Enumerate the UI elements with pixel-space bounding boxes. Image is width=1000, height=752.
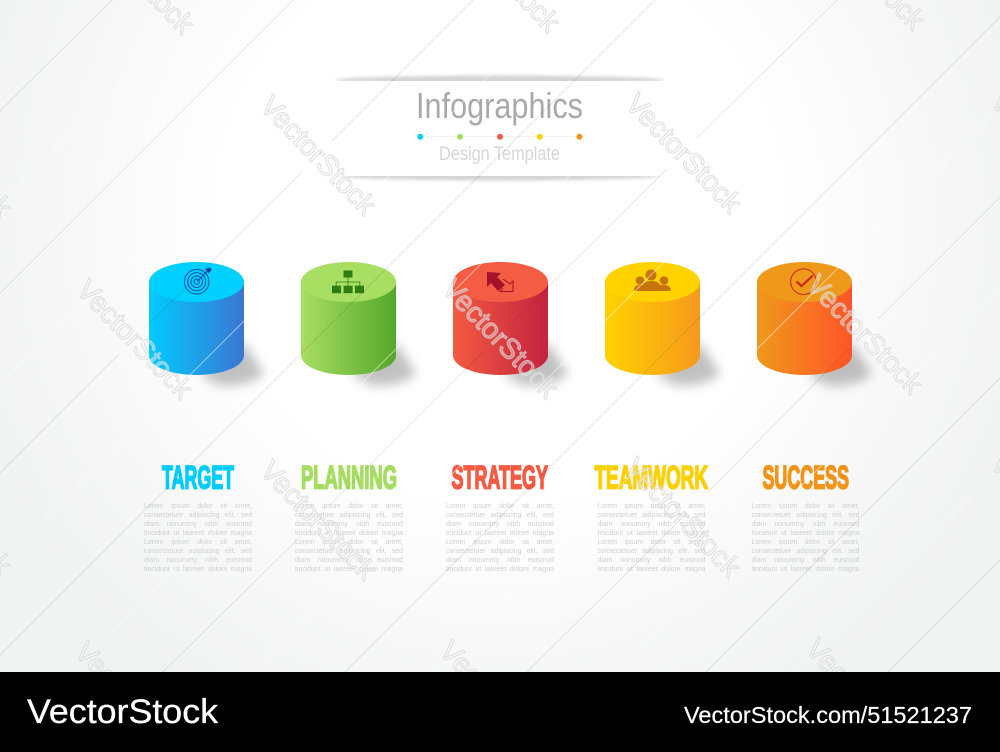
text block: planning: diam nonummy nibh euismod <box>295 520 403 528</box>
text block: target: tincidunt ut laoreet dolore magna <box>144 566 252 572</box>
text block: success: consectetuer adipiscing elit, sed <box>752 548 860 554</box>
watermarks: VectorStock <box>800 269 929 401</box>
text block: target: diam nonummy nibh euismod <box>144 556 252 564</box>
heading: success: SUCCESS <box>762 460 849 496</box>
watermarks: VectorStock <box>70 274 199 406</box>
heading: target: TARGET <box>162 460 234 496</box>
cylinder: planning <box>301 262 416 386</box>
heading: strategy: STRATEGY <box>452 460 548 496</box>
text block: planning: consectetuer adipiscing elit, sed <box>295 512 403 518</box>
cylinder: teamwork <box>605 262 720 386</box>
text block: strategy <box>446 502 554 572</box>
title: Infographics <box>416 85 583 126</box>
cylinder: strategy <box>453 262 568 386</box>
text block: teamwork: consectetuer adipiscing elit, sed <box>598 512 706 518</box>
heading: teamwork: TEAMWORK <box>594 460 708 496</box>
text block: target: Lorem ipsum dolor sit amet, <box>144 502 252 510</box>
panel: title strip <box>320 76 680 180</box>
text block: planning: tincidunt ut laoreet dolore magna <box>295 530 403 536</box>
footer image id: VectorStock.com/51521237 <box>684 702 972 728</box>
text block: teamwork: consectetuer adipiscing elit, sed <box>598 548 706 554</box>
text block: strategy: Lorem ipsum dolor sit amet, <box>446 502 554 510</box>
subtitle: Design Template <box>439 144 560 165</box>
icon: check mark <box>791 269 816 295</box>
icon: org chart <box>332 270 364 293</box>
text block: success: consectetuer adipiscing elit, sed <box>752 512 860 518</box>
text block: strategy: tincidunt ut laoreet dolore magna <box>446 566 554 572</box>
footer logo text: VectorStock <box>27 693 219 731</box>
watermarks: VectorStock <box>253 455 383 587</box>
text block: strategy: diam nonummy nibh euismod <box>446 556 554 564</box>
text block: strategy: tincidunt ut laoreet dolore magna <box>446 530 554 536</box>
text block: teamwork: diam nonummy nibh euismod <box>598 556 706 564</box>
text block: strategy: Lorem ipsum dolor sit amet, <box>446 538 554 546</box>
text block: planning: tincidunt ut laoreet dolore magna <box>295 566 403 572</box>
text block: success: Lorem ipsum dolor sit amet, <box>752 502 860 510</box>
text block: success: tincidunt ut laoreet dolore magna <box>752 530 860 536</box>
text block: teamwork <box>598 502 706 572</box>
text block: target: diam nonummy nibh euismod <box>144 520 252 528</box>
cylinder: success <box>757 262 872 386</box>
text block: planning: Lorem ipsum dolor sit amet, <box>295 538 403 546</box>
watermarks: VectorStock <box>253 90 383 222</box>
text block: target <box>144 502 252 572</box>
text block: teamwork: diam nonummy nibh euismod <box>598 520 706 528</box>
text block: target: tincidunt ut laoreet dolore magna <box>144 530 252 536</box>
text block: teamwork: tincidunt ut laoreet dolore magna <box>598 530 706 536</box>
icon: people <box>634 270 670 291</box>
text block: strategy: diam nonummy nibh euismod <box>446 520 554 528</box>
watermarks: VectorStock <box>435 273 565 405</box>
watermarks: VectorStock <box>619 88 748 220</box>
icon: target <box>184 268 211 294</box>
text block: success <box>752 502 860 572</box>
text block: teamwork: tincidunt ut laoreet dolore magna <box>598 566 706 572</box>
text block: strategy: consectetuer adipiscing elit, sed <box>446 548 554 554</box>
text block: success: Lorem ipsum dolor sit amet, <box>752 538 860 546</box>
text block: planning: consectetuer adipiscing elit, sed <box>295 548 403 554</box>
text block: planning <box>295 502 403 572</box>
text block: strategy: consectetuer adipiscing elit, sed <box>446 512 554 518</box>
heading: planning: PLANNING <box>301 460 397 496</box>
text block: target: Lorem ipsum dolor sit amet, <box>144 538 252 546</box>
cylinder: target <box>149 262 264 386</box>
icon: arrows <box>487 272 513 292</box>
text block: success: diam nonummy nibh euismod <box>752 556 860 564</box>
text block: target: consectetuer adipiscing elit, sed <box>144 548 252 554</box>
footer bar <box>0 672 1000 752</box>
text block: success: diam nonummy nibh euismod <box>752 520 860 528</box>
watermarks: VectorStock <box>618 452 747 584</box>
text block: success: tincidunt ut laoreet dolore magna <box>752 566 860 572</box>
dotted colour line <box>417 134 582 140</box>
text block: teamwork: Lorem ipsum dolor sit amet, <box>598 538 706 546</box>
text block: planning: diam nonummy nibh euismod <box>295 556 403 564</box>
text block: planning: Lorem ipsum dolor sit amet, <box>295 502 403 510</box>
text block: teamwork: Lorem ipsum dolor sit amet, <box>598 502 706 510</box>
text block: target: consectetuer adipiscing elit, sed <box>144 512 252 518</box>
